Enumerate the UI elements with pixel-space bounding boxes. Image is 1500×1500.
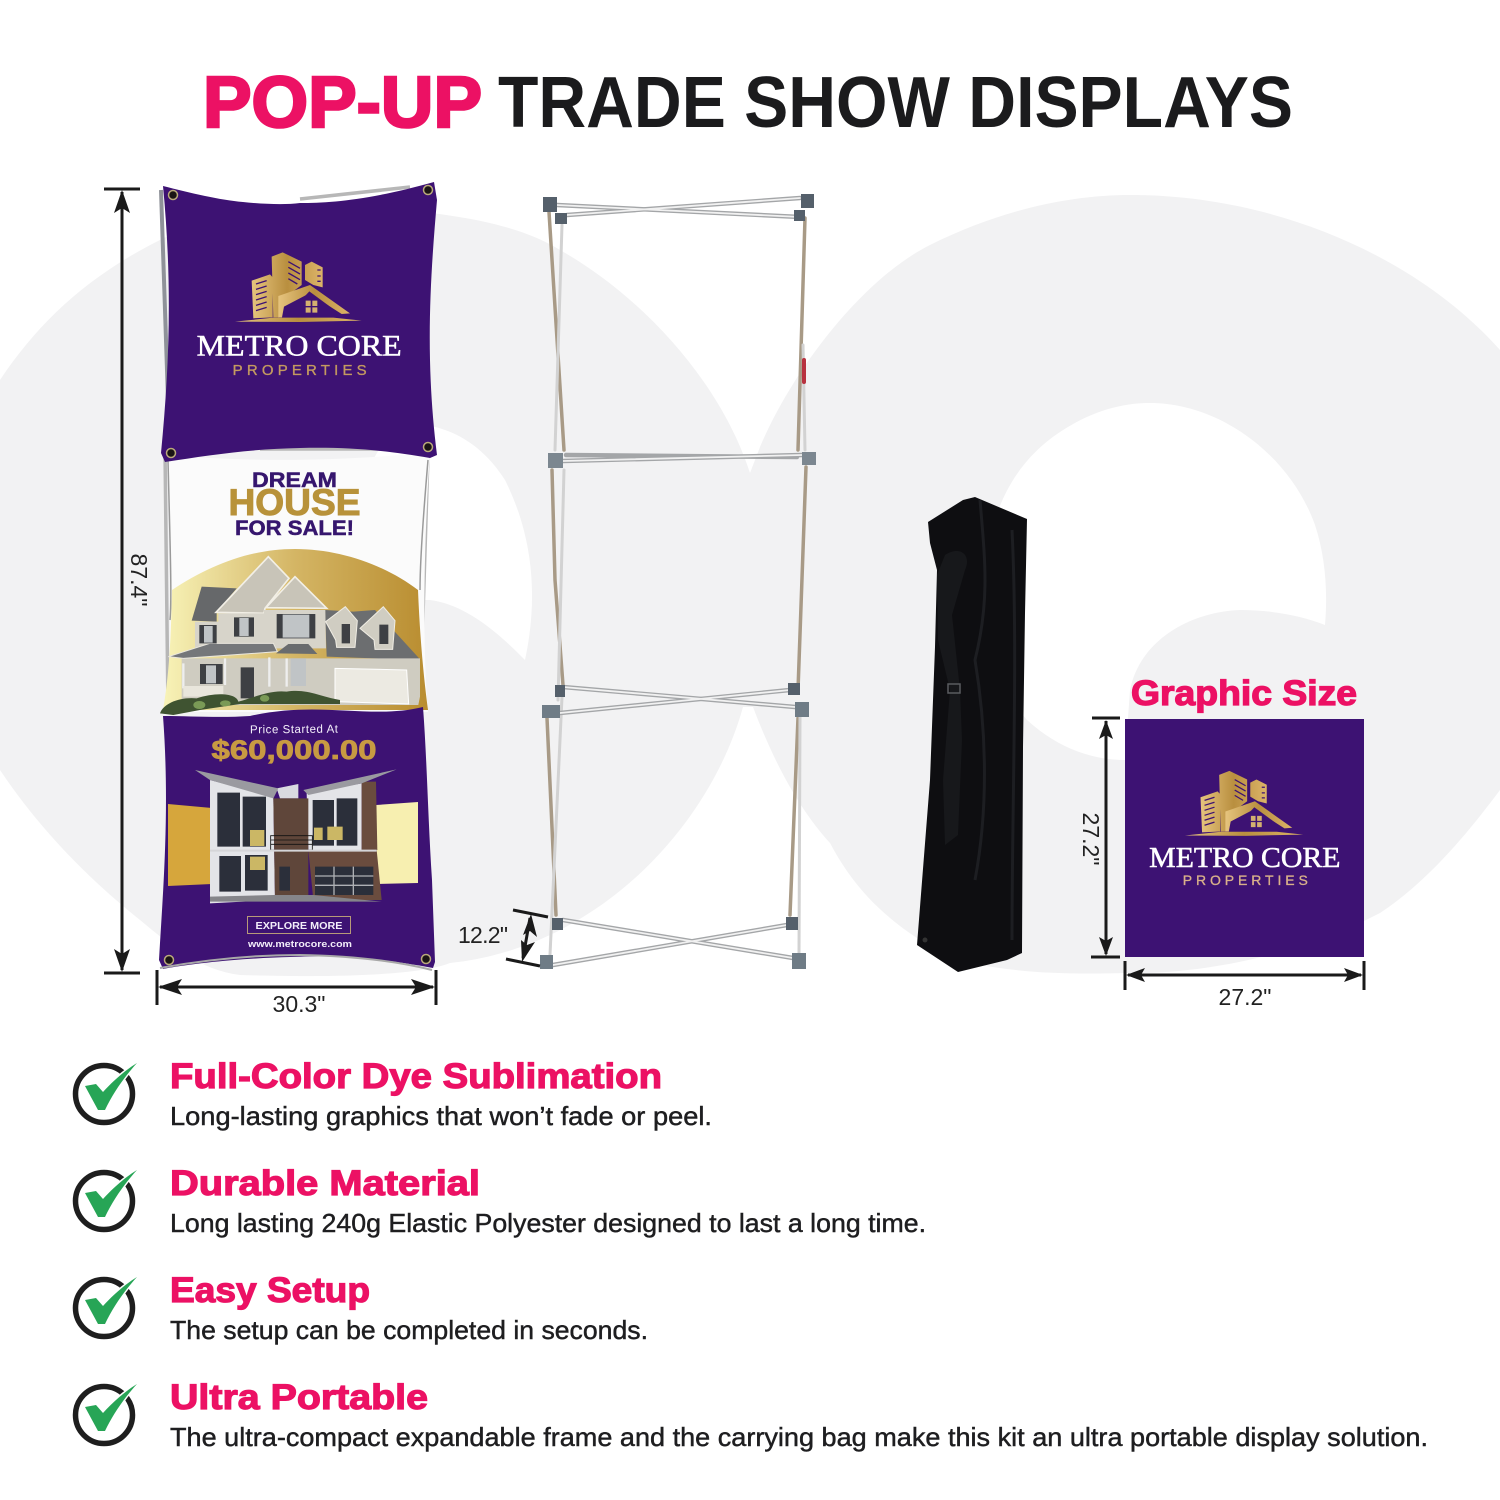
background shape: left lobe xyxy=(0,195,1500,976)
carrying bag xyxy=(917,497,1027,972)
dimension: graphic height 27.2 inches xyxy=(1078,718,1120,957)
grommets xyxy=(166,186,432,458)
panel: flat graphic xyxy=(1125,719,1364,957)
dimension: frame depth 12.2 inches xyxy=(458,910,548,966)
strap buckle xyxy=(948,684,960,693)
title xyxy=(203,63,1293,143)
gold bands xyxy=(168,804,212,886)
logo: Metro Core Properties: METRO CORE xyxy=(1149,843,1340,874)
sale headline: DREAM xyxy=(252,469,337,492)
description: The setup can be completed in seconds. xyxy=(170,1315,648,1345)
feature: full-color dye sublimation xyxy=(76,1057,712,1131)
panel: top purple banner xyxy=(161,182,437,462)
dimension: width 30.3 inches: 30.3" xyxy=(273,991,325,1017)
panel: bottom purple banner xyxy=(159,707,435,969)
grommets xyxy=(164,954,430,964)
logo: Metro Core Properties: PROPERTIES xyxy=(1183,872,1308,888)
price text: $60,000.00 xyxy=(212,735,376,765)
dimension: graphic width 27.2 inches xyxy=(1125,961,1364,1010)
dimension: height 87.4 inches xyxy=(104,189,152,973)
assembled display banner xyxy=(159,182,437,970)
background shape: left white hole xyxy=(353,424,532,660)
panel: middle white banner xyxy=(160,452,430,715)
sale headline xyxy=(228,469,360,540)
modern house illustration xyxy=(195,769,397,903)
heading: Full-Color Dye Sublimation xyxy=(170,1057,662,1096)
expanded pop-up frame xyxy=(540,194,816,969)
icon: check mark xyxy=(76,1170,137,1230)
gold dome xyxy=(163,549,428,710)
feature: durable material xyxy=(76,1164,926,1238)
logo: Metro Core Properties: PROPERTIES xyxy=(233,362,367,379)
silver cross bars xyxy=(553,198,802,965)
dimension: height 87.4 inches: 87.4" xyxy=(126,554,152,606)
title: TRADE SHOW DISPLAYS xyxy=(498,63,1293,143)
sale headline: FOR SALE! xyxy=(235,517,354,540)
logo: Metro Core Properties xyxy=(1149,771,1340,888)
bag fold highlights xyxy=(975,500,1015,940)
silver vertical struts xyxy=(550,225,805,955)
bag grommet xyxy=(922,938,928,942)
description: Long lasting 240g Elastic Polyester designed to last a long time. xyxy=(170,1208,926,1238)
logo: Metro Core Properties xyxy=(197,252,402,379)
dimension: frame depth 12.2 inches: 12.2" xyxy=(458,922,508,948)
icon: check mark xyxy=(76,1277,137,1336)
price text: Price Started At xyxy=(250,724,339,736)
feature: ultra portable xyxy=(76,1378,1428,1452)
frame bars behind banner xyxy=(165,187,428,710)
heading: Durable Material xyxy=(170,1164,480,1203)
house illustration xyxy=(160,557,421,715)
dimension: width 30.3 inches xyxy=(157,970,436,1017)
graphic size label: Graphic Size xyxy=(1131,674,1357,713)
dimension: graphic width 27.2 inches: 27.2" xyxy=(1219,984,1271,1010)
logo: Metro Core Properties: METRO CORE xyxy=(197,330,402,363)
heading: Ultra Portable xyxy=(170,1378,428,1417)
sale headline: HOUSE xyxy=(228,482,360,523)
background shape: right spiral hole xyxy=(985,403,1326,760)
icon: check mark xyxy=(76,1063,137,1122)
icon: check mark xyxy=(76,1384,137,1444)
shoulder strap xyxy=(937,551,967,845)
heading: Easy Setup xyxy=(170,1271,370,1310)
price text xyxy=(212,724,376,765)
website url: www.metrocore.com xyxy=(247,939,352,950)
description: The ultra-compact expandable frame and the carrying bag make this kit an ultra portable display solution. xyxy=(170,1422,1428,1452)
tan vertical struts xyxy=(547,212,806,915)
explore more button: EXPLORE MORE xyxy=(256,921,343,932)
corner connectors xyxy=(540,194,816,969)
dimension: graphic height 27.2 inches: 27.2" xyxy=(1078,813,1104,865)
title: POP-UP xyxy=(203,63,482,143)
explore more button xyxy=(248,916,350,934)
feature: easy setup xyxy=(76,1271,648,1345)
red label on strut xyxy=(802,360,806,382)
description: Long-lasting graphics that won’t fade or peel. xyxy=(170,1101,712,1131)
